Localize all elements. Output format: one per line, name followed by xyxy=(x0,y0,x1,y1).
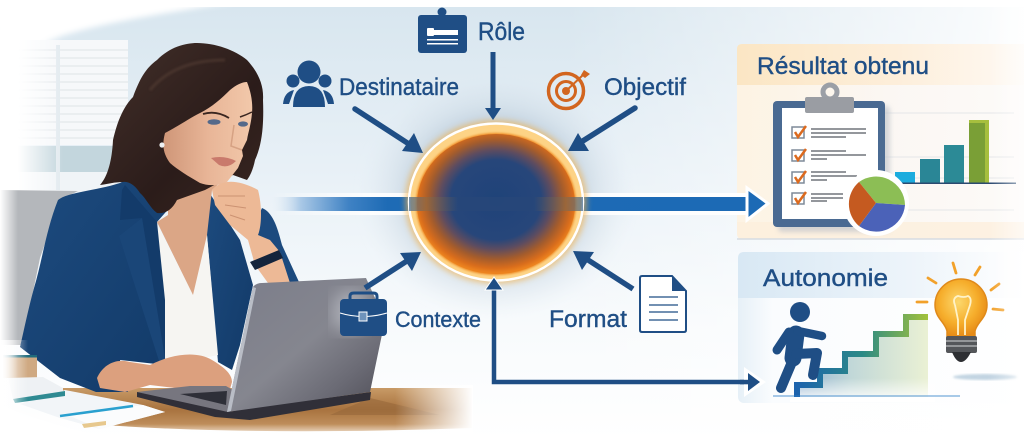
arrow: objectif xyxy=(568,108,635,151)
table xyxy=(0,385,500,439)
icon: clipboard xyxy=(773,85,890,232)
label: destinataire: Destinataire xyxy=(339,74,459,101)
face xyxy=(163,82,252,185)
arrow: main flow head xyxy=(730,188,768,220)
watch xyxy=(250,250,283,270)
typing hand xyxy=(97,355,232,396)
woman xyxy=(20,43,299,396)
pie chart xyxy=(843,170,909,236)
chair xyxy=(0,190,78,345)
central circle xyxy=(272,70,762,320)
hand at chin xyxy=(212,182,290,283)
office window xyxy=(0,30,128,200)
stairs xyxy=(773,317,960,402)
icon: destinataire xyxy=(283,60,334,107)
panel: autonomie xyxy=(738,252,1024,403)
heading: Autonomie xyxy=(763,265,888,292)
heading: Résultat obtenu xyxy=(757,53,929,80)
chart gridlines xyxy=(885,113,1014,210)
shirt xyxy=(156,222,218,366)
arrow: format xyxy=(573,251,633,289)
books and papers xyxy=(0,340,165,439)
panel: résultat obtenu xyxy=(730,44,1024,239)
label: format: Format xyxy=(549,306,627,333)
icon: rôle badge xyxy=(418,8,467,53)
label: objectif: Objectif xyxy=(604,74,686,101)
arrow: feedback loop xyxy=(485,277,766,397)
checklist xyxy=(792,126,866,204)
icon: format document xyxy=(640,276,686,332)
laptop xyxy=(137,278,385,420)
neck and chest xyxy=(157,160,225,295)
flow band xyxy=(272,193,762,215)
label: rôle: Rôle xyxy=(478,18,525,46)
light rays xyxy=(917,263,1003,310)
arrow: rôle xyxy=(485,52,501,120)
eyes and lips xyxy=(159,112,252,166)
lapel xyxy=(120,185,165,365)
arrow: destinataire xyxy=(355,109,423,153)
jacket xyxy=(20,172,172,392)
icon: climbing person xyxy=(777,302,822,388)
label: contexte: Contexte xyxy=(395,307,481,332)
bar chart xyxy=(885,120,1016,184)
hair xyxy=(100,43,263,213)
arrow: contexte xyxy=(365,252,421,288)
icon: contexte briefcase xyxy=(340,293,387,336)
halo xyxy=(356,70,636,320)
icon: objectif target xyxy=(548,70,590,108)
icon: light bulb xyxy=(917,263,1003,362)
